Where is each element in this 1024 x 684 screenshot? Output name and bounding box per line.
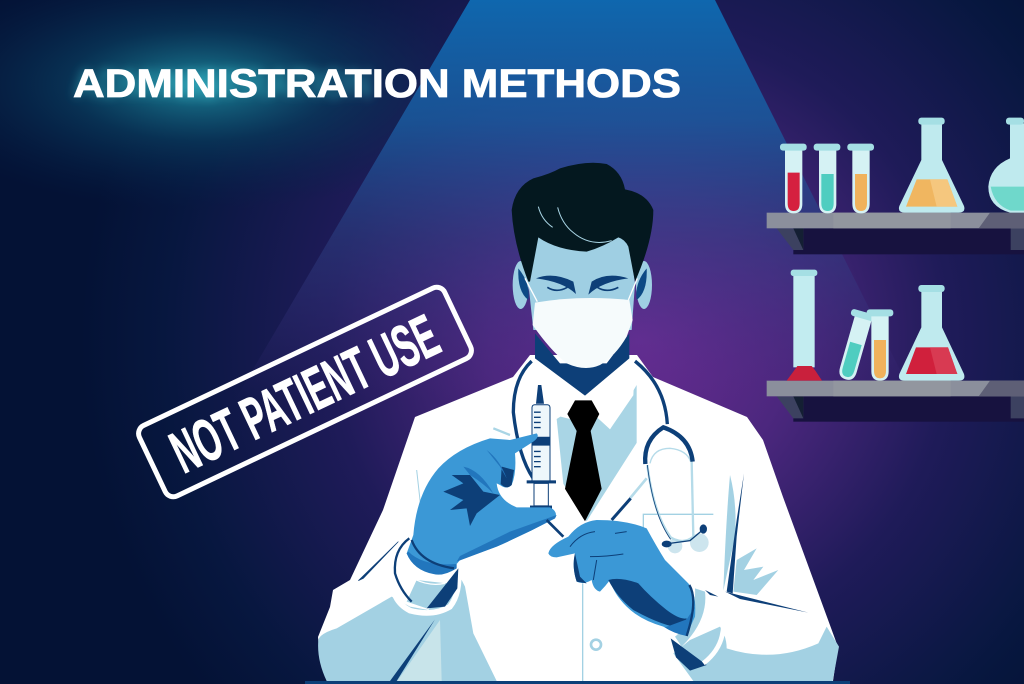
bottom shelf [767,381,1024,422]
spotlight beam [235,0,915,400]
red erlenmeyer flask [899,285,964,381]
pocket and button [583,514,713,681]
right cuff [675,588,723,663]
stamp: not patient use [136,284,474,500]
laboratory shelves [767,118,1024,422]
face [528,235,635,330]
title: ADMINISTRATION [73,62,373,106]
orange erlenmeyer flask [899,118,964,213]
eyebrows and closed eyes [536,276,628,295]
doctor figure [318,163,839,681]
shirt collar [530,365,637,521]
coat opening dark line [612,498,631,520]
lab coat [318,355,838,681]
coat opening line [547,520,563,537]
stethoscope tubes [513,361,667,479]
right sleeve [671,627,839,681]
face mask [525,278,637,368]
left arm and hand [318,428,563,681]
teal round flask [988,118,1024,213]
hair [512,163,653,282]
blue glove [407,433,557,575]
ears [513,261,652,309]
top shelf [767,213,1024,254]
leaning teal test tube [833,308,878,383]
orange test tube [847,144,874,213]
right arm, hand, pocket [548,427,839,681]
blue glove [548,520,695,636]
stamp: not patient use: NOT PATIENT USE [160,302,449,486]
teal test tube [814,144,840,213]
left cuff [393,538,459,613]
left sleeve [318,428,510,681]
graduated cylinder with red base [787,270,822,381]
title: ADMINISTRATION METHODS [73,62,681,106]
syringe [527,346,556,509]
red test tube [780,144,807,213]
stethoscope chest piece [645,427,707,547]
title glow [0,0,500,210]
orange test tube [867,309,893,381]
head [512,163,653,396]
floor strip [305,681,850,684]
shirt, tie, stethoscope and syringe [513,346,667,521]
coat fold [723,473,808,613]
coat opening line [630,478,647,498]
black tie [565,400,602,521]
neck [535,333,629,396]
